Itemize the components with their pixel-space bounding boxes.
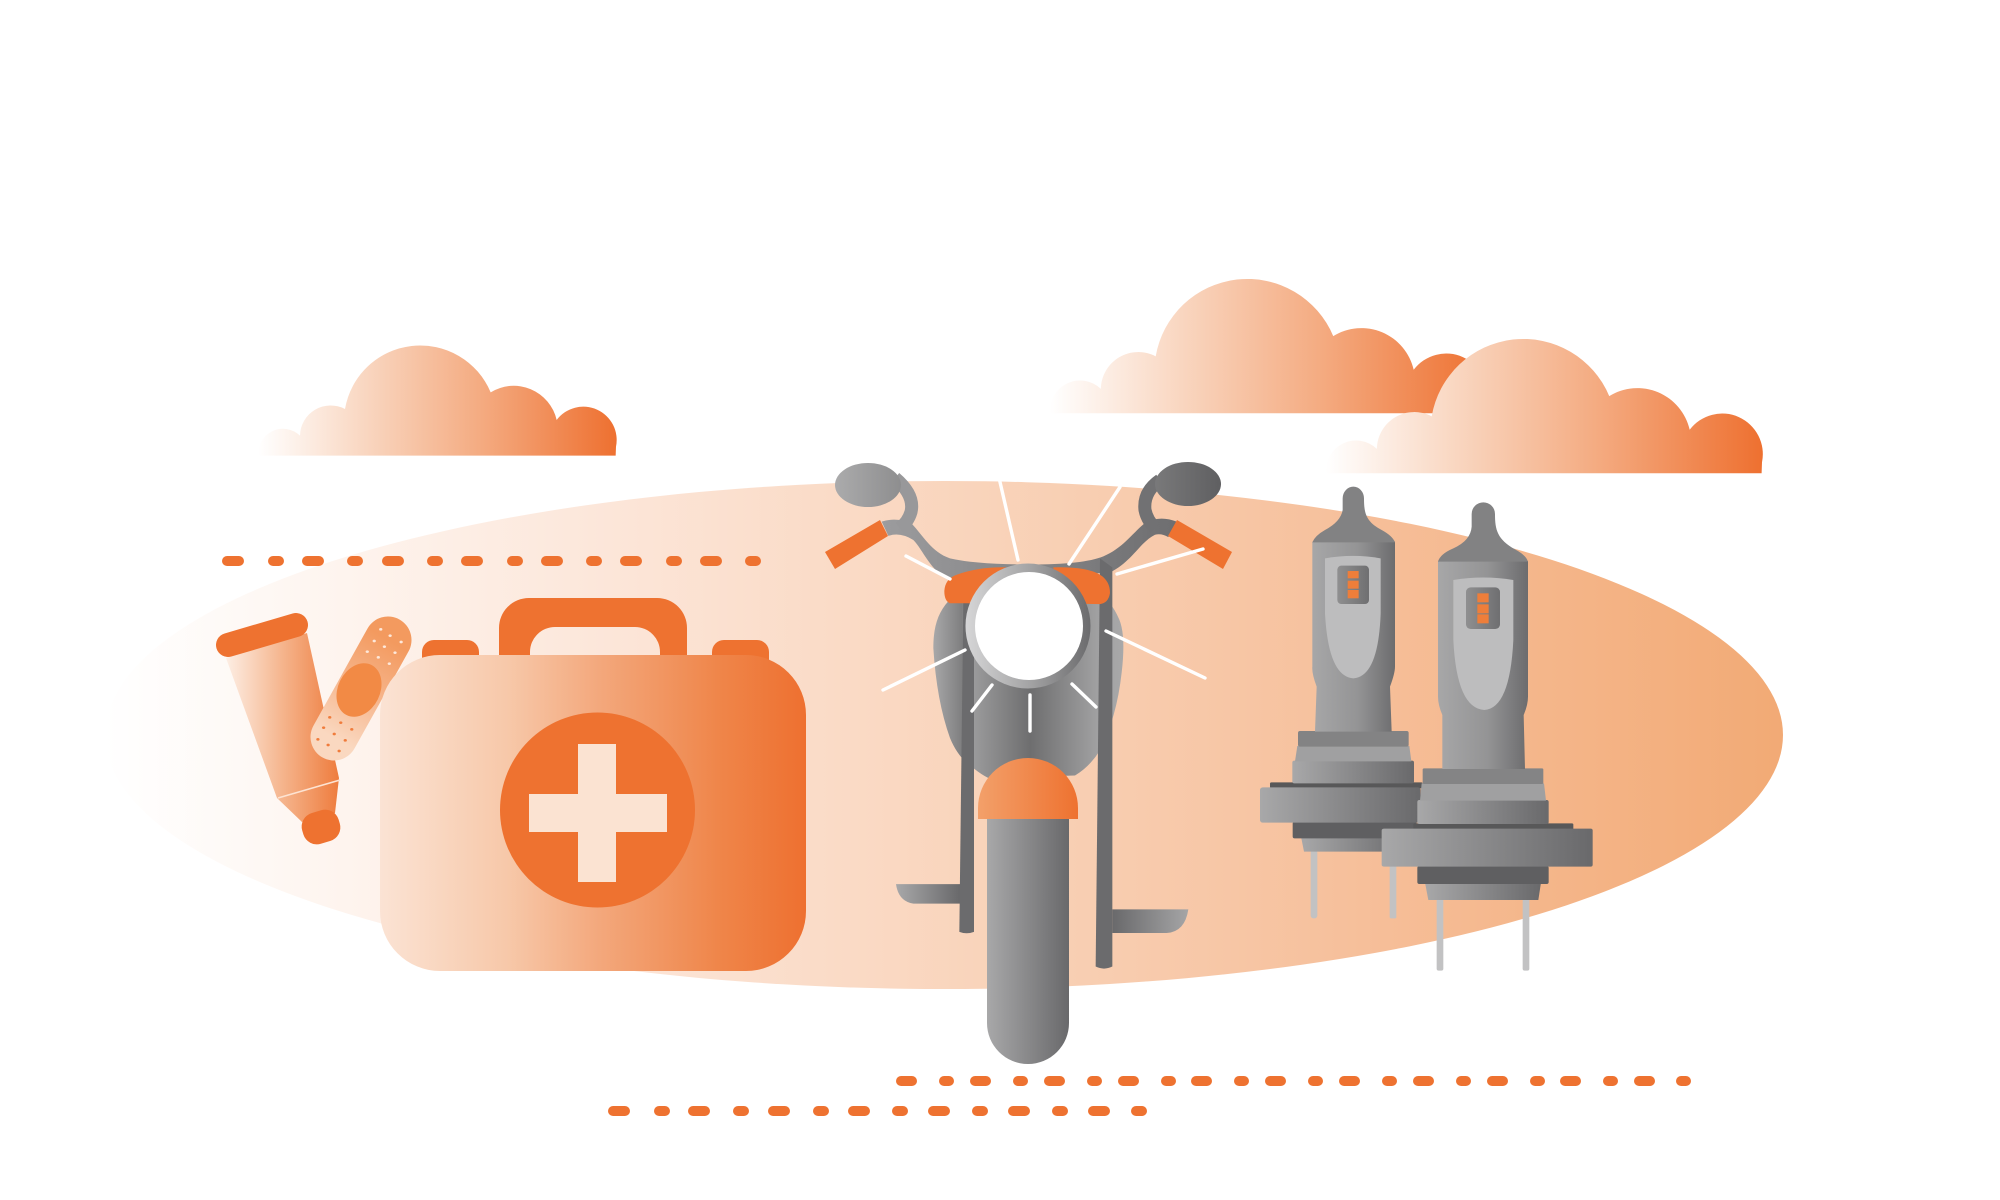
cloud: left — [258, 345, 617, 456]
icon: first aid kit — [380, 598, 806, 971]
right bulb glass body — [1438, 561, 1528, 769]
icon: left bulb — [1260, 487, 1423, 918]
right bulb flange — [1382, 829, 1593, 867]
left bulb tip — [1312, 487, 1395, 542]
right bulb tip — [1438, 502, 1528, 562]
left orange wing — [944, 567, 1007, 603]
kit case — [380, 655, 806, 971]
front wheel — [987, 819, 1069, 1064]
kit right latch — [712, 640, 769, 680]
right bulb light ring — [1420, 783, 1546, 801]
right bulb dark band — [1417, 866, 1549, 884]
left bulb reflector — [1325, 556, 1381, 678]
right fork — [1096, 558, 1112, 969]
right mirror — [1155, 462, 1221, 506]
left bulb filament — [1348, 571, 1359, 598]
left mirror stem — [895, 478, 912, 528]
left bulb pins — [1311, 850, 1396, 918]
dashed line: upper left — [222, 556, 761, 566]
left bulb lower collar — [1301, 837, 1410, 852]
icon: right bulb — [1382, 502, 1593, 971]
icon: bandage — [316, 628, 403, 752]
left mirror — [835, 463, 901, 507]
left bulb flange — [1260, 787, 1421, 823]
left bulb top ring — [1298, 731, 1409, 747]
handlebars — [882, 519, 1177, 581]
background ellipse — [105, 481, 1783, 989]
left bulb dark band — [1293, 822, 1417, 838]
right foot peg — [1112, 909, 1188, 933]
left grip — [825, 520, 888, 569]
icon: ointment tube — [226, 625, 344, 848]
right bulb lower collar — [1425, 883, 1541, 900]
left fork — [959, 599, 974, 933]
kit cross — [529, 744, 667, 882]
tank body — [933, 601, 1123, 778]
left bulb glass body — [1312, 542, 1395, 732]
bandage strip — [334, 640, 388, 737]
left bulb light ring — [1295, 746, 1411, 761]
left bulb window — [1337, 566, 1369, 604]
left foot peg — [896, 884, 960, 904]
cloud: back — [1050, 279, 1487, 413]
front fender — [978, 758, 1078, 819]
bandage pad — [328, 656, 390, 724]
right mirror stem — [1145, 480, 1160, 528]
right bulb flange top strip — [1413, 823, 1573, 830]
right orange wing — [1053, 567, 1110, 604]
tube crease — [278, 780, 340, 798]
bandage dots — [316, 628, 403, 752]
right grip — [1168, 520, 1232, 569]
headlight lens — [975, 572, 1083, 680]
right bulb pins — [1437, 898, 1529, 971]
headlight ring — [966, 564, 1090, 688]
right bulb window — [1466, 587, 1500, 629]
left bulb flange top strip — [1270, 782, 1423, 788]
headlight rays — [883, 469, 1205, 731]
tube body — [226, 633, 339, 822]
cloud: front — [1326, 339, 1763, 473]
dashed line: lower left — [608, 1106, 1147, 1116]
left bulb base ring — [1292, 761, 1414, 783]
dashed line: lower right — [896, 1076, 1691, 1086]
kit emblem circle — [500, 712, 695, 908]
right bulb base ring — [1417, 800, 1549, 824]
icon: motorcycle front view — [825, 462, 1232, 1064]
right bulb top ring — [1423, 768, 1543, 784]
kit left latch — [422, 640, 479, 680]
kit handle — [499, 598, 687, 670]
right bulb filament — [1477, 593, 1489, 623]
tube top cap — [228, 625, 296, 645]
tube nozzle cap — [298, 806, 344, 848]
right bulb reflector — [1453, 577, 1513, 710]
clouds: right pair — [1050, 279, 1763, 473]
